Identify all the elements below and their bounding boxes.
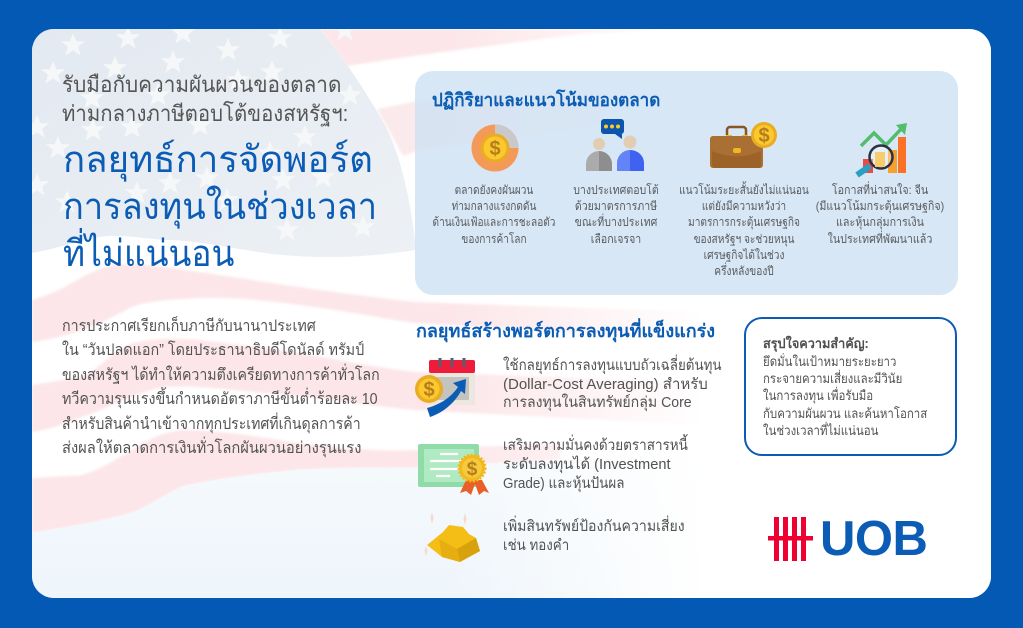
text: market volatility: ตลาดยังคงผันผวน bbox=[455, 183, 533, 197]
text: opportunities: และหุ้นกลุ่มการเงิน bbox=[836, 215, 924, 229]
text: dollar-cost averaging: การลงทุนในสินทรัพย์กลุ่ม Core bbox=[503, 394, 692, 411]
intro paragraph bbox=[62, 316, 380, 458]
text: short-term trend: มาตรการกระตุ้นเศรษฐกิจ bbox=[688, 215, 800, 229]
subtitle: รับมือกับความผันผวนของตลาด bbox=[62, 72, 341, 97]
text: country responses: บางประเทศตอบโต้ bbox=[573, 183, 658, 197]
text: country responses bbox=[573, 183, 658, 246]
main title: กลยุทธ์การจัดพอร์ต bbox=[63, 139, 373, 180]
main title bbox=[63, 139, 377, 274]
callout body: กระจายความเสี่ยงและมีวินัย bbox=[763, 371, 902, 386]
text: short-term trend: แนวโน้มระยะสั้นยังไม่แน่นอน bbox=[679, 183, 809, 197]
icon: briefcase with coin bbox=[710, 122, 777, 168]
icon: two people with speech bubble bbox=[586, 119, 644, 171]
icon: certificate with badge bbox=[418, 444, 489, 495]
logo wordmark: UOB bbox=[820, 512, 927, 566]
subtitle bbox=[62, 72, 348, 126]
icon: donut chart with coin: $ bbox=[489, 138, 501, 160]
callout body: ยึดมั่นในเป้าหมายระยะยาว bbox=[763, 354, 896, 369]
icon: gold bars bbox=[424, 512, 480, 562]
intro paragraph: การประกาศเรียกเก็บภาษีกับนานาประเทศ bbox=[62, 318, 316, 335]
intro paragraph: ส่งผลให้ตลาดการเงินทั่วโลกผันผวนอย่างรุนแรง bbox=[62, 440, 361, 457]
callout body: กับความผันผวน และค้นหาโอกาส bbox=[763, 406, 927, 421]
text: market volatility: ท่ามกลางแรงกดดัน bbox=[452, 199, 536, 213]
text: gold hedge bbox=[503, 516, 685, 554]
callout body bbox=[763, 353, 927, 438]
icon: donut chart with coin bbox=[472, 124, 518, 172]
callout heading: สรุปใจความสำคัญ: bbox=[763, 336, 869, 351]
text: investment grade bonds: Grade) และหุ้นปันผล bbox=[503, 475, 624, 492]
text: country responses: เลือกเจรจา bbox=[590, 232, 641, 246]
text: opportunities: (มีแนวโน้มกระตุ้นเศรษฐกิจ) bbox=[816, 199, 944, 213]
icon: calendar with coin bbox=[415, 358, 475, 417]
text: short-term trend: ของสหรัฐฯ จะช่วยหนุน bbox=[694, 232, 794, 246]
panel: market reactions and trends bbox=[415, 71, 958, 295]
text: gold hedge: เพิ่มสินทรัพย์ป้องกันความเสี่ยง bbox=[503, 518, 685, 535]
text: country responses: ด้วยมาตรการภาษี bbox=[574, 199, 657, 213]
text: opportunities: โอกาสที่น่าสนใจ: จีน bbox=[832, 183, 928, 197]
logo mark bbox=[768, 517, 813, 561]
main title: การลงทุนในช่วงเวลา bbox=[63, 186, 377, 227]
icon: briefcase with coin: $ bbox=[758, 125, 770, 147]
text: short-term trend bbox=[679, 181, 809, 278]
text: short-term trend: แต่ยังมีความหวังว่า bbox=[702, 199, 786, 213]
text: market volatility: ของการค้าโลก bbox=[461, 232, 527, 246]
text: investment grade bonds bbox=[503, 434, 688, 492]
text: short-term trend: เศรษฐกิจได้ในช่วง bbox=[704, 248, 784, 262]
icon: calendar with coin: $ bbox=[423, 379, 435, 401]
text: country responses: ขณะที่บางประเทศ bbox=[574, 215, 657, 229]
icon: growth chart with magnifier bbox=[855, 123, 907, 178]
intro paragraph: สำหรับสินค้านำเข้าจากทุกประเทศที่เกินดุลการค้า bbox=[62, 416, 361, 433]
intro paragraph: ของสหรัฐฯ ได้ทำให้ความตึงเครียดทางการค้าทั่วโลก bbox=[62, 367, 380, 384]
text: dollar-cost averaging: (Dollar-Cost Averaging) สำหรับ bbox=[503, 376, 708, 393]
intro paragraph: ใน “วันปลดแอก” โดยประธานาธิบดีโดนัลด์ ทรัมป์ bbox=[62, 342, 364, 359]
text: dollar-cost averaging: ใช้กลยุทธ์การลงทุนแบบถัวเฉลี่ยต้นทุน bbox=[503, 357, 722, 374]
icon: certificate with badge: $ bbox=[467, 459, 478, 480]
text: market volatility: ด้านเงินเฟ้อและการชะลอตัว bbox=[433, 215, 555, 229]
text: opportunities bbox=[816, 182, 944, 246]
text: short-term trend: ครึ่งหลังของปี bbox=[714, 264, 774, 278]
intro paragraph: ทวีความรุนแรงขึ้นกำหนดอัตราภาษีขั้นต่ำร้อยละ 10 bbox=[62, 391, 378, 408]
text: gold hedge: เช่น ทองคำ bbox=[503, 537, 569, 554]
callout: key takeaways bbox=[744, 317, 957, 456]
text: investment grade bonds: ระดับลงทุนได้ (Investment bbox=[503, 456, 671, 473]
callout body: ในช่วงเวลาที่ไม่แน่นอน bbox=[763, 423, 878, 438]
panel heading: ปฏิกิริยาและแนวโน้มของตลาด bbox=[432, 90, 660, 110]
text: opportunities: ในประเทศที่พัฒนาแล้ว bbox=[828, 232, 932, 246]
subtitle: ท่ามกลางภาษีตอบโต้ของสหรัฐฯ: bbox=[62, 101, 348, 126]
callout body: ในการลงทุน เพื่อรับมือ bbox=[763, 388, 873, 403]
logo: UOB bbox=[768, 512, 927, 566]
heading: resilient portfolio strategy: กลยุทธ์สร้างพอร์ตการลงทุนที่แข็งแกร่ง bbox=[416, 321, 715, 341]
text: investment grade bonds: เสริมความมั่นคงด้วยตราสารหนี้ bbox=[503, 437, 688, 454]
text: dollar-cost averaging bbox=[503, 354, 722, 412]
text: market volatility bbox=[433, 183, 555, 246]
main title: ที่ไม่แน่นอน bbox=[63, 233, 234, 274]
